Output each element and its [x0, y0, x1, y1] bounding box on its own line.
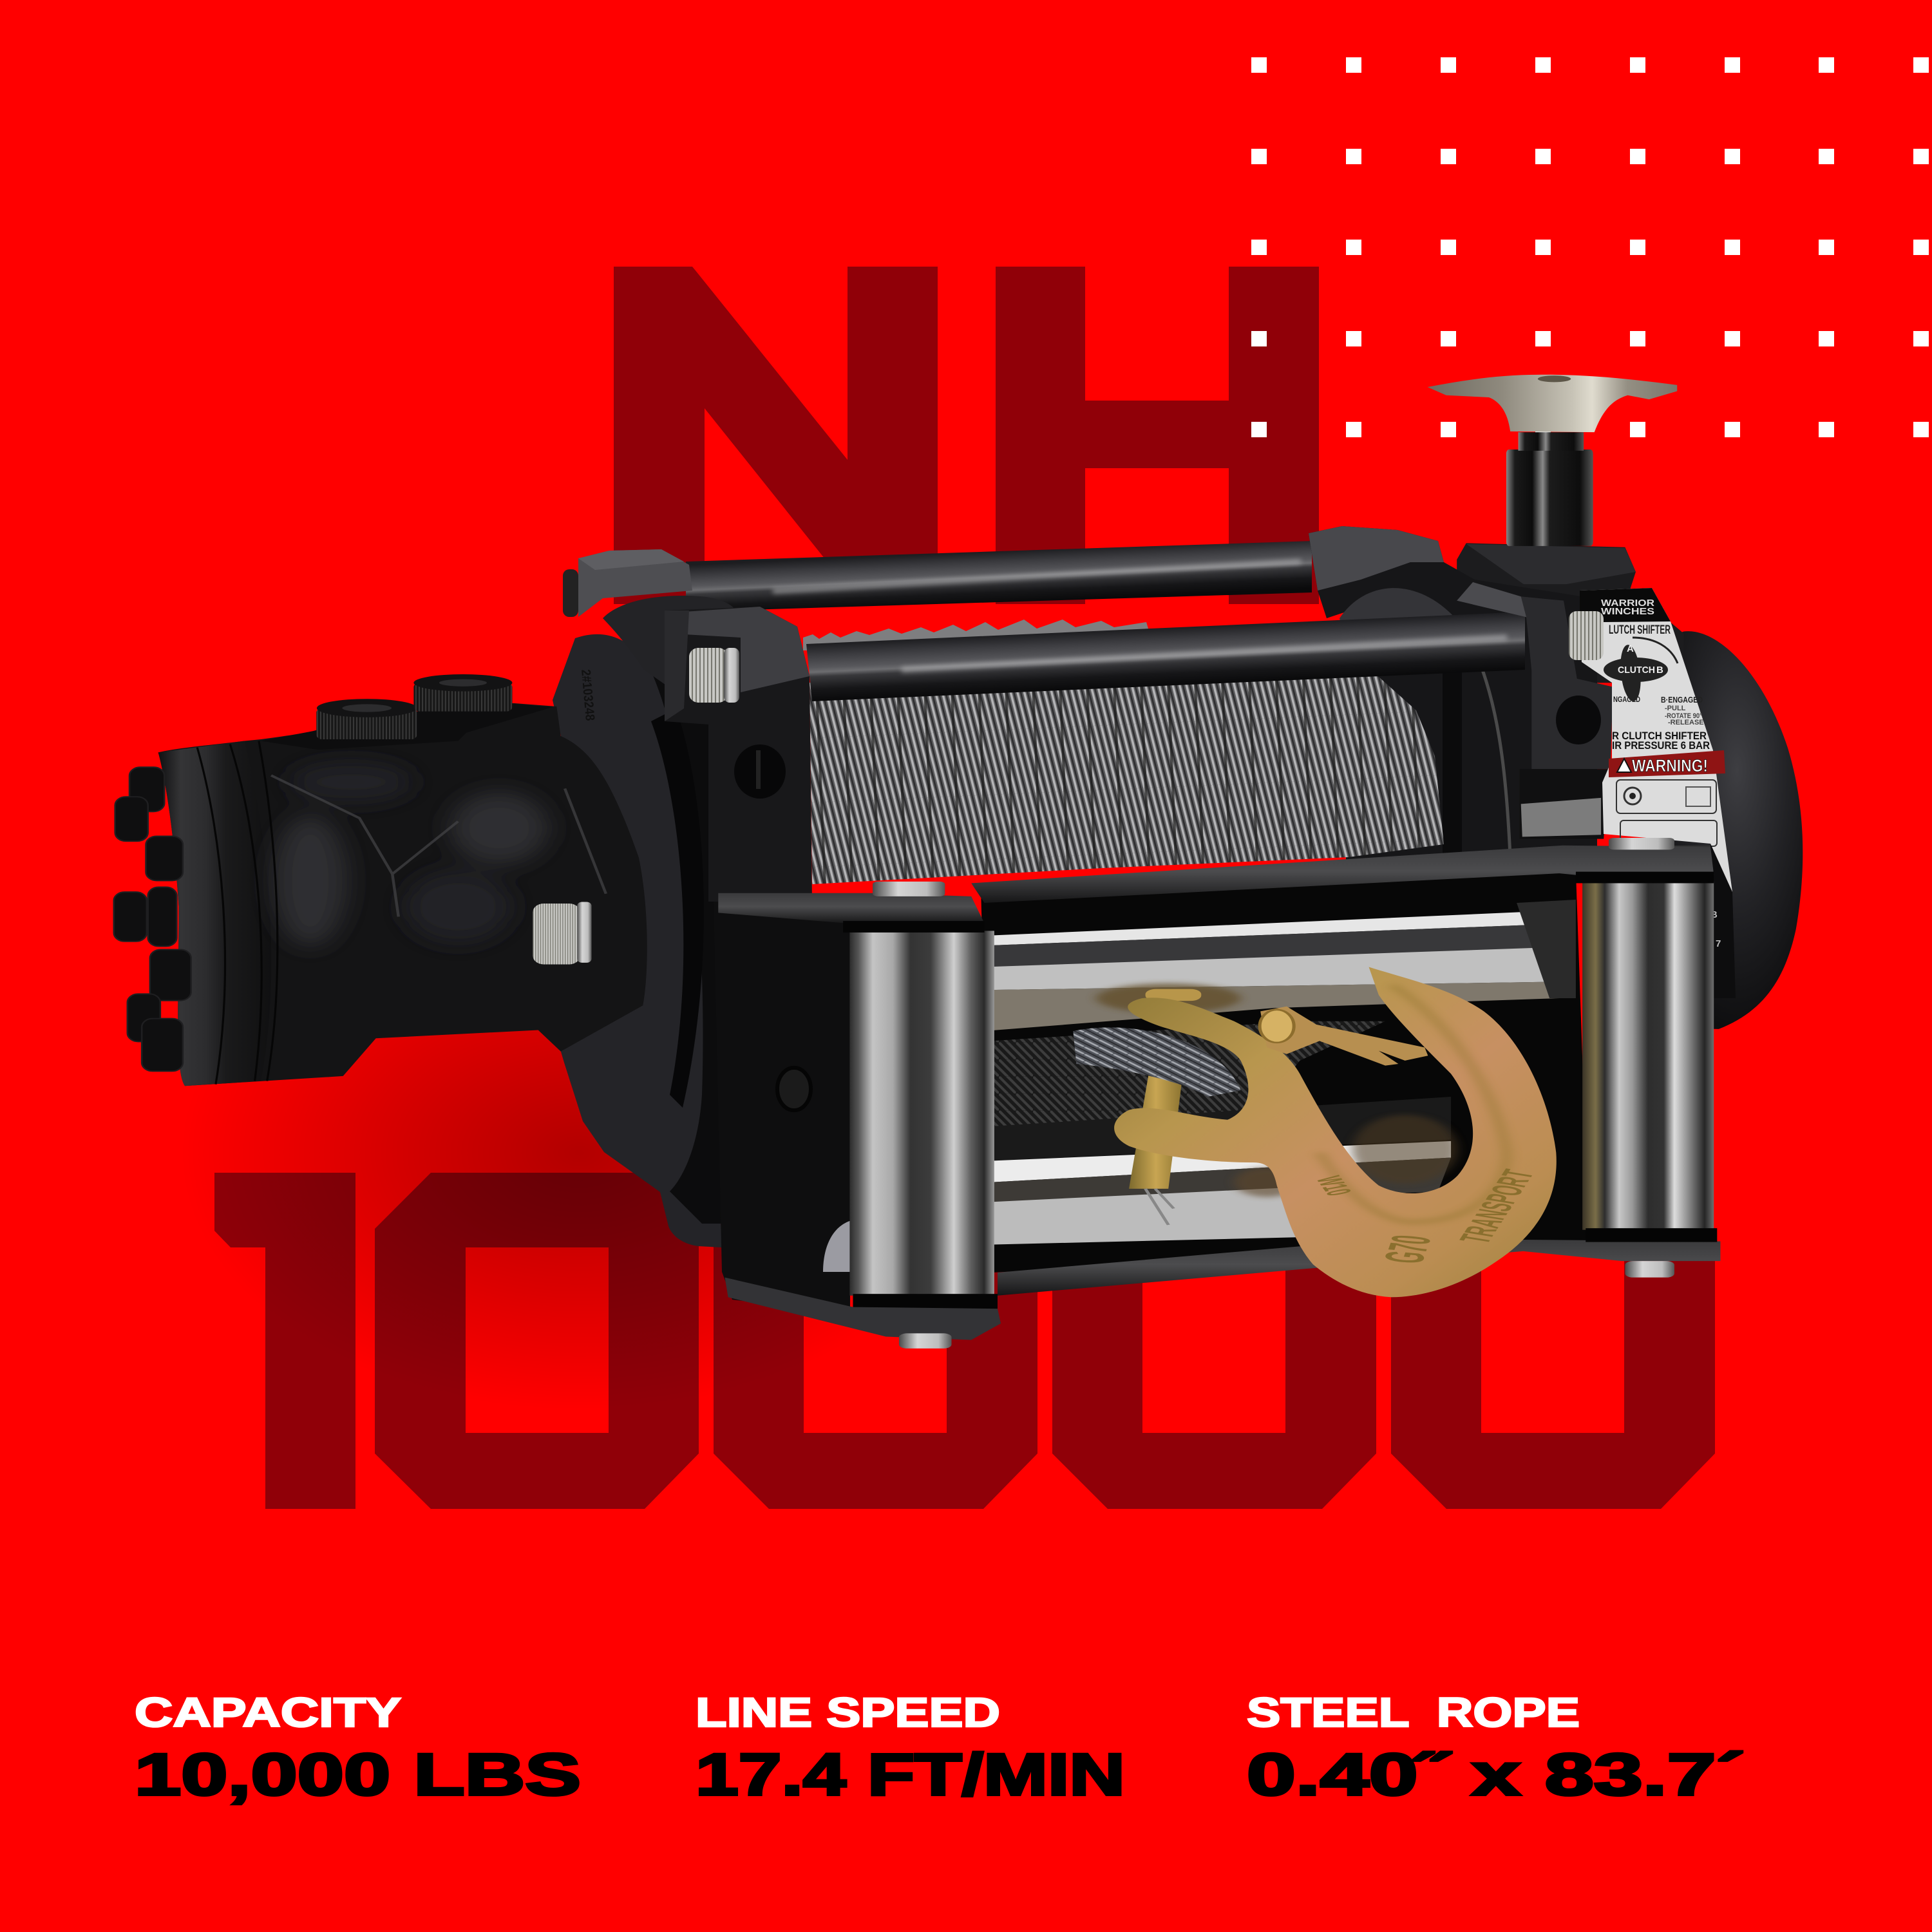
giant model number: 10000: 0 — [336, 1053, 737, 1628]
wire rope drum — [803, 620, 1444, 884]
spec: steel rope — [1247, 1689, 1745, 1808]
left chrome roller — [849, 931, 994, 1296]
lower chrome roller — [991, 1097, 1457, 1245]
wrapped rope eye — [1073, 1027, 1241, 1097]
warning decal — [1580, 588, 1736, 998]
giant model name: NH: N — [585, 166, 966, 701]
giant model name: NH: H — [967, 166, 1348, 701]
top plate — [971, 846, 1714, 903]
flange dark ring — [651, 708, 704, 1108]
slotted plug — [734, 744, 786, 799]
spec: steel rope: 0.40˝ x 83.7´ — [1247, 1742, 1745, 1808]
bottom plate — [998, 1240, 1720, 1296]
warning decal: R CLUTCH SHIFTER — [1612, 730, 1707, 742]
rope behind hook — [991, 1021, 1385, 1126]
spec: capacity — [135, 1689, 581, 1808]
front left bracket and side casting — [603, 596, 812, 902]
warning decal: NGAGED — [1613, 695, 1640, 704]
back tie rod — [686, 541, 1312, 612]
warning decal: A — [1627, 643, 1634, 654]
back left bracket — [563, 549, 692, 617]
T-handle clutch knob — [1428, 375, 1684, 683]
motor hex bolts — [114, 767, 191, 1071]
warning decal: B — [1656, 665, 1663, 676]
white dot grid — [1251, 57, 1929, 437]
silver motor bolt — [533, 902, 592, 964]
spec: steel rope: STEEL ROPE — [1247, 1689, 1580, 1736]
spec: capacity: CAPACITY — [135, 1689, 401, 1736]
hook stamping: G70 — [1373, 1233, 1443, 1265]
winch product illustration — [114, 375, 1803, 1349]
motor end cap — [158, 741, 271, 1086]
spec: line speed — [696, 1689, 1125, 1808]
fairlead window with horizontal rollers — [718, 838, 1720, 1349]
fairlead frame side plate — [714, 902, 851, 1314]
flange plate — [553, 634, 728, 1247]
winch drop shadow — [180, 895, 979, 1410]
warning decal: WARRIOR — [1601, 598, 1654, 609]
spec: line speed: LINE SPEED — [696, 1689, 1000, 1736]
warning decal: -ROTATE 90° — [1665, 712, 1702, 720]
reflection of shackle — [1096, 983, 1241, 1013]
hook stamping: TRANSPORT — [1450, 1167, 1542, 1246]
giant model number: 10000: 1 — [134, 1052, 420, 1628]
flange plate: 2#103248 — [578, 669, 597, 721]
hydraulic motor — [114, 674, 647, 1086]
upper chrome roller — [985, 900, 1576, 1031]
giant model number: 10000: 0 — [1014, 1053, 1414, 1628]
giant model number: 10000: 0 — [1352, 1053, 1753, 1628]
giant model number: 10000: 0 — [675, 1053, 1075, 1628]
spec: capacity: 10,000 LBS — [135, 1742, 581, 1808]
hook stamping: W10 — [1309, 1173, 1358, 1198]
hook stamping — [1309, 1167, 1542, 1265]
right bracket — [1457, 582, 1613, 839]
motor highlights — [273, 762, 549, 946]
giant model name: NH — [585, 166, 1348, 701]
motor cap screws — [316, 674, 512, 739]
spec: line speed: 17.4 FT/MIN — [696, 1742, 1125, 1808]
warning decal: -RELEASE — [1668, 719, 1704, 726]
right knurled bolt and plug — [1556, 611, 1604, 744]
right chrome roller — [1582, 882, 1714, 1230]
warning decal: 7 — [1716, 938, 1721, 949]
gold hook — [1114, 967, 1557, 1297]
warning decal: IR PRESSURE 6 BAR — [1612, 739, 1710, 752]
warning decal: WINCHES — [1601, 606, 1654, 617]
giant model number: 10000 — [214, 1173, 1715, 1509]
silver frame bolt — [689, 648, 739, 703]
warning decal: -PULL — [1665, 705, 1686, 712]
left roller nuts — [873, 882, 952, 1349]
warning decal: LUTCH SHIFTER — [1609, 623, 1671, 637]
front tie rod — [806, 612, 1525, 701]
drum housing — [1309, 526, 1597, 863]
clevis pin — [1129, 989, 1201, 1225]
warning decal: CLUTCH — [1618, 665, 1655, 676]
hook latch — [1260, 1007, 1428, 1066]
warning decal: WARNING! — [1632, 756, 1708, 775]
warning decal: B·ENGAGED — [1661, 695, 1703, 705]
warning decal: B — [1710, 909, 1718, 920]
right roller nuts — [1609, 838, 1674, 1278]
right end dome — [1657, 631, 1803, 1029]
